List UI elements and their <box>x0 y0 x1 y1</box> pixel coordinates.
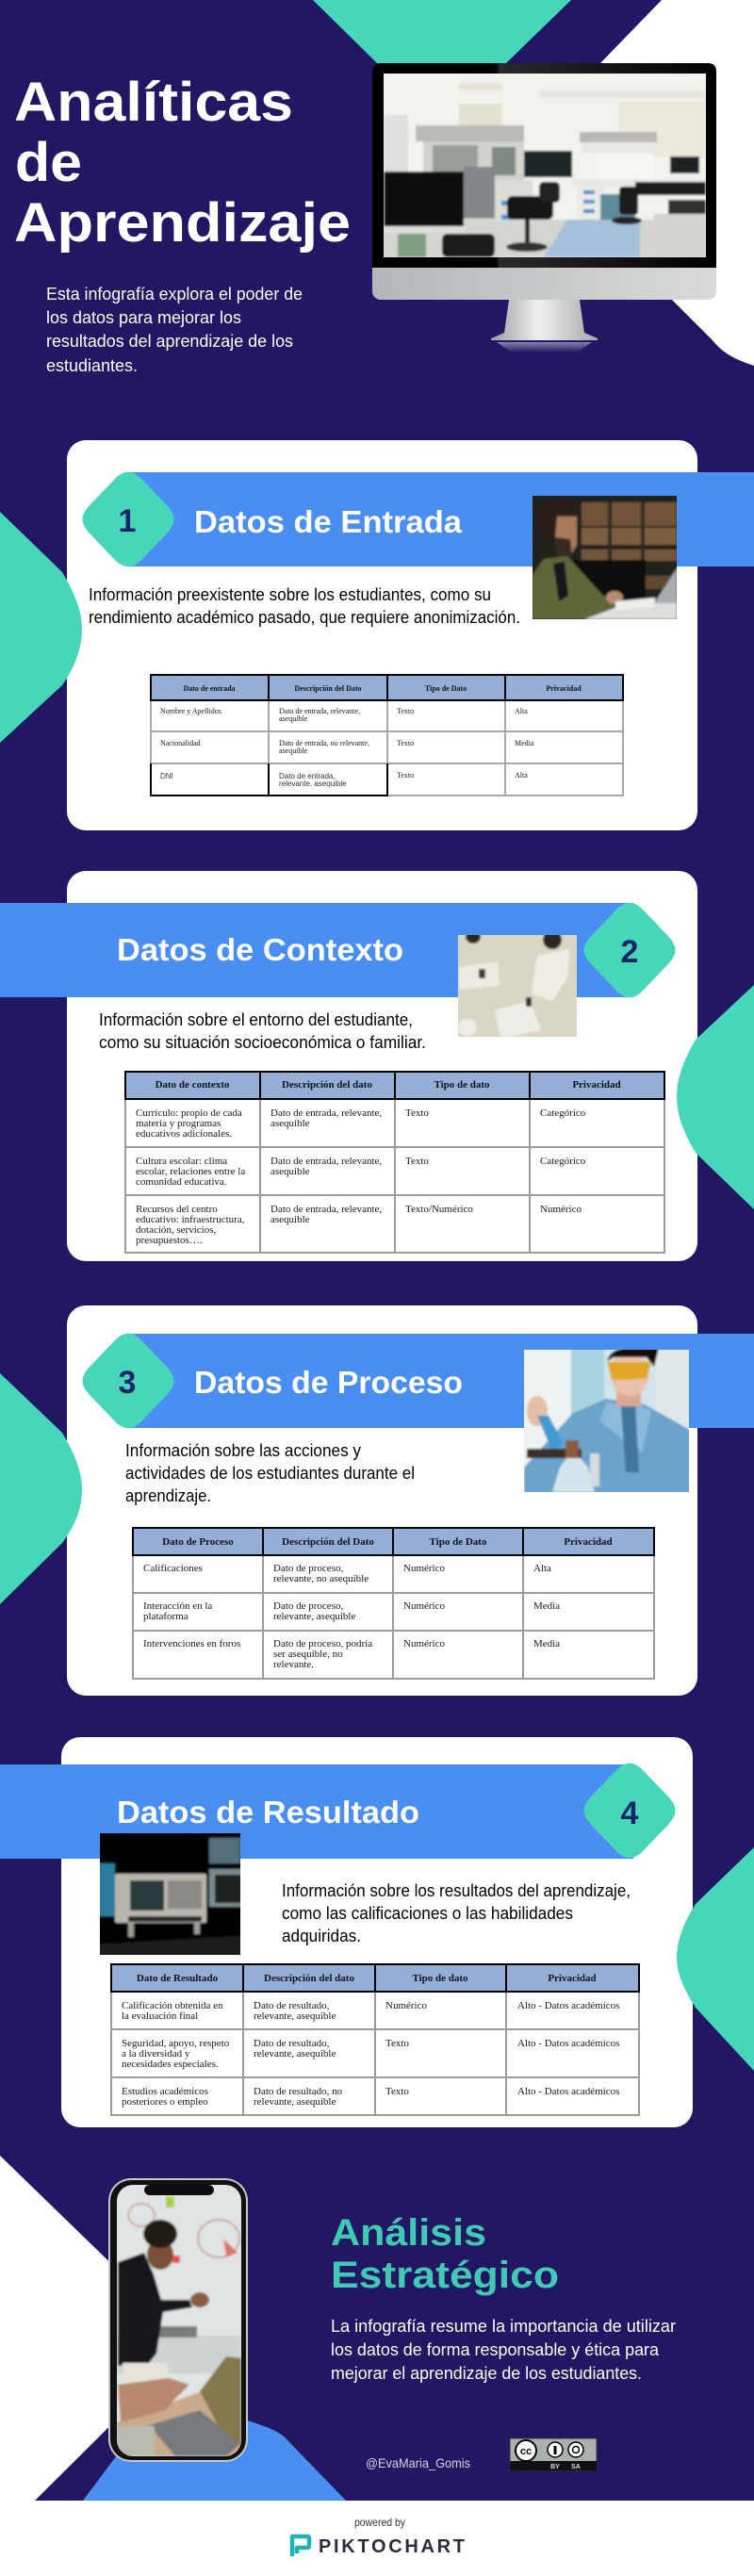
card background <box>67 440 697 830</box>
number badge 1 <box>83 472 173 566</box>
table: datos de proceso: Media <box>533 1638 560 1649</box>
table: datos de contexto: Dato de entrada, relevante, <box>270 1108 382 1119</box>
heading: Datos de Resultado <box>117 1795 419 1829</box>
table: datos de resultado <box>111 1964 639 2115</box>
intro text: los datos para mejorar los <box>46 308 241 327</box>
closing text: La infografía resume la importancia de utilizar <box>331 2317 676 2336</box>
title: Analíticas <box>14 72 293 133</box>
table: datos de contexto: asequible <box>270 1166 310 1177</box>
table: datos de proceso: Numérico <box>403 1600 445 1612</box>
cc license badge: BY <box>550 2464 560 2470</box>
photo: papers on a desk <box>458 935 577 1037</box>
table: datos de proceso: Numérico <box>403 1563 445 1574</box>
description: Información sobre los resultados del aprendizaje, <box>282 1881 631 1900</box>
table: datos de proceso: Media <box>533 1600 560 1612</box>
table: datos de resultado: Alto - Datos académicos <box>517 2086 619 2097</box>
cc license badge <box>510 2438 597 2470</box>
table: datos de entrada: Descripción del Dato <box>294 684 362 693</box>
table: datos de resultado: Tipo de dato <box>412 1973 468 1984</box>
table: datos de entrada: Nombre y Apellidos <box>160 707 221 715</box>
table: datos de contexto: Recursos del centro <box>136 1204 218 1215</box>
teal trapezoid <box>313 0 571 113</box>
table: datos de contexto: Dato de contexto <box>156 1079 230 1091</box>
closing text <box>331 2317 676 2383</box>
table: datos de entrada: Dato de entrada, <box>279 772 336 780</box>
table: datos de entrada: Dato de entrada <box>183 684 236 693</box>
footer <box>0 2501 754 2576</box>
teal blob left 1 <box>0 512 82 743</box>
header band <box>130 472 754 566</box>
cc license badge: cc <box>520 2446 532 2457</box>
table: datos de entrada: Alta <box>515 771 528 779</box>
heading: Datos de Contexto <box>117 932 403 967</box>
table: datos de proceso: Interacción en la <box>143 1600 212 1612</box>
header band <box>0 1764 633 1859</box>
description: Información preexistente sobre los estudiantes, como su <box>89 585 491 604</box>
closing heading <box>331 2212 559 2296</box>
closing heading: Análisis <box>331 2212 486 2254</box>
white triangle left <box>0 2156 193 2501</box>
table: datos de contexto: Cultura escolar: clima <box>136 1156 227 1167</box>
table: datos de contexto: asequible <box>270 1214 310 1225</box>
phone illustration <box>107 2175 251 2466</box>
title: de <box>15 132 82 193</box>
description: actividades de los estudiantes durante el <box>125 1464 415 1483</box>
table: datos de entrada: Dato de entrada, relevante, <box>279 707 360 715</box>
monitor illustration <box>372 63 716 353</box>
table: datos de entrada: Nacionalidad <box>160 739 201 747</box>
header band <box>130 1334 754 1428</box>
table: datos de contexto: Texto <box>405 1156 429 1167</box>
table: datos de contexto: comunidad educativa. <box>136 1176 227 1188</box>
description: rendimiento académico pasado, que requiere anonimización. <box>89 608 520 627</box>
table: datos de proceso: Alta <box>533 1563 551 1574</box>
white corner shape <box>528 0 754 366</box>
description <box>99 1010 426 1052</box>
number badge 2 <box>584 903 675 997</box>
panel: Datos de Resultado <box>0 1737 693 2127</box>
intro text <box>46 285 303 375</box>
table: datos de proceso: relevante, asequible <box>273 1611 355 1622</box>
table: datos de resultado: necesidades especiales. <box>122 2059 219 2070</box>
table: datos de proceso: Dato de proceso, <box>273 1563 343 1574</box>
table: datos de entrada: Privacidad <box>546 684 582 693</box>
table: datos de proceso: Calificaciones <box>143 1563 203 1574</box>
table: datos de entrada: Alta <box>515 707 528 715</box>
table: datos de contexto: Descripción del dato <box>282 1079 372 1091</box>
footer background <box>0 2501 754 2576</box>
panel: Datos de Proceso <box>67 1305 754 1696</box>
table: datos de entrada: Media <box>515 739 534 747</box>
piktochart logo icon <box>292 2536 309 2556</box>
table: datos de entrada <box>151 675 623 796</box>
table: datos de contexto: dotación, servicios, <box>136 1224 216 1236</box>
table: datos de contexto: presupuestos…. <box>136 1235 203 1246</box>
table: datos de proceso: Tipo de Dato <box>430 1536 487 1548</box>
table: datos de proceso: relevante. <box>273 1659 314 1670</box>
description: como su situación socioeconómica o familiar. <box>99 1033 426 1052</box>
table: datos de resultado: Alto - Datos académicos <box>517 2038 619 2049</box>
teal blob left 3 <box>0 1373 82 1604</box>
table: datos de resultado: relevante, asequible <box>254 2096 336 2108</box>
table: datos de contexto: Texto <box>405 1108 429 1119</box>
closing text: los datos de forma responsable y ética para <box>331 2340 660 2359</box>
table: datos de resultado: Dato de resultado, <box>254 2000 330 2011</box>
hero section <box>14 0 754 375</box>
closing section <box>0 2156 676 2501</box>
heading: Datos de Entrada <box>194 504 463 539</box>
card background <box>67 1305 697 1696</box>
description: Información sobre las acciones y <box>125 1441 361 1460</box>
table: datos de contexto: asequible <box>270 1118 310 1129</box>
number badge 4: 4 <box>621 1796 639 1831</box>
powered by: powered by <box>354 2516 405 2529</box>
table: datos de proceso: ser asequible, no <box>273 1649 343 1660</box>
table: datos de entrada: Dato de entrada, no relevante, <box>279 739 369 747</box>
table: datos de contexto: educativos adicionales. <box>136 1128 232 1140</box>
table: datos de resultado: a la diversidad y <box>122 2048 190 2059</box>
panel: Datos de Contexto <box>0 871 697 1261</box>
intro text: estudiantes. <box>46 356 138 375</box>
description: Información sobre el entorno del estudiante, <box>99 1010 413 1029</box>
table: datos de contexto: Privacidad <box>572 1079 621 1091</box>
number badge 2: 2 <box>621 934 638 970</box>
blue shape <box>83 2385 346 2501</box>
table: datos de proceso: relevante, no asequible <box>273 1573 369 1584</box>
table: datos de entrada: Texto <box>397 771 414 779</box>
table: datos de proceso: Descripción del Dato <box>282 1536 374 1548</box>
card background <box>67 871 697 1261</box>
intro text: resultados del aprendizaje de los <box>46 332 293 351</box>
table: datos de entrada: relevante, asequible <box>279 779 347 788</box>
table: datos de contexto: materia y programas <box>136 1118 221 1129</box>
table: datos de contexto: Texto/Numérico <box>405 1204 473 1215</box>
table: datos de resultado: Dato de resultado, <box>254 2038 330 2049</box>
table: datos de resultado: la evaluación final <box>122 2010 198 2022</box>
number badge 3 <box>83 1334 173 1428</box>
table: datos de proceso: Numérico <box>403 1638 445 1649</box>
table: datos de resultado: Privacidad <box>548 1973 597 1984</box>
table: datos de resultado: Descripción del dato <box>264 1973 354 1984</box>
teal blob right 4 <box>677 1847 754 2071</box>
photo: man at laptop <box>533 496 677 619</box>
table: datos de contexto: Tipo de dato <box>434 1079 490 1091</box>
table: datos de resultado: Alto - Datos académicos <box>517 2000 619 2011</box>
number badge 1: 1 <box>119 503 136 539</box>
table: datos de entrada: asequible <box>279 747 308 755</box>
title <box>14 72 351 254</box>
table: datos de proceso: plataforma <box>143 1611 188 1622</box>
table: datos de proceso: Privacidad <box>564 1536 613 1548</box>
description <box>125 1441 415 1505</box>
table: datos de proceso: Dato de proceso, podría <box>273 1638 372 1649</box>
number badge 4 <box>584 1764 675 1858</box>
table: datos de resultado: Dato de resultado, no <box>254 2086 343 2097</box>
table: datos de contexto: escolar, relaciones entre la <box>136 1166 245 1177</box>
table: datos de proceso <box>133 1528 654 1679</box>
table: datos de contexto: Categórico <box>540 1156 586 1167</box>
table: datos de resultado: relevante, asequible <box>254 2010 336 2022</box>
description: como las calificaciones o las habilidades <box>282 1904 573 1923</box>
description: adquiridas. <box>282 1927 361 1945</box>
title: Aprendizaje <box>14 192 351 254</box>
teal blob right 2 <box>677 985 754 1209</box>
table: datos de resultado: Numérico <box>385 2000 427 2011</box>
table: datos de resultado: Seguridad, apoyo, respeto <box>122 2038 230 2049</box>
table: datos de proceso: Dato de Proceso <box>162 1536 234 1548</box>
table: datos de resultado: relevante, asequible <box>254 2048 336 2059</box>
table: datos de resultado: posteriores o empleo <box>122 2096 208 2108</box>
table: datos de resultado: Dato de Resultado <box>137 1973 219 1984</box>
photo: oscilloscope <box>100 1833 240 1955</box>
card background <box>61 1737 693 2127</box>
author handle: @EvaMaria_Gomis <box>366 2455 470 2470</box>
table: datos de entrada: Tipo de Dato <box>425 684 467 693</box>
piktochart wordmark: PIKTOCHART <box>319 2536 465 2557</box>
table: datos de resultado: Calificación obtenida en <box>122 2000 223 2011</box>
description: aprendizaje. <box>125 1486 211 1505</box>
table: datos de contexto: educativo: infraestructura, <box>136 1214 245 1225</box>
panel: Datos de Entrada <box>67 440 754 830</box>
table: datos de entrada: Texto <box>397 739 414 747</box>
table: datos de contexto: Currículo: propio de cada <box>136 1108 242 1119</box>
table: datos de contexto <box>125 1072 664 1253</box>
table: datos de contexto: Dato de entrada, relevante, <box>270 1156 382 1167</box>
intro text: Esta infografía explora el poder de <box>46 285 303 304</box>
table: datos de proceso: Intervenciones en foros <box>143 1638 240 1649</box>
description <box>282 1881 631 1945</box>
closing heading: Estratégico <box>331 2255 559 2296</box>
table: datos de proceso: Dato de proceso, <box>273 1600 343 1612</box>
table: datos de resultado: Texto <box>385 2038 409 2049</box>
table: datos de contexto: Numérico <box>540 1204 582 1215</box>
header band <box>0 903 633 997</box>
table: datos de entrada: DNI <box>160 772 173 780</box>
photo: scientist with flask <box>524 1350 689 1492</box>
description <box>89 585 520 627</box>
cc license badge: SA <box>571 2464 581 2470</box>
heading: Datos de Proceso <box>194 1365 463 1400</box>
closing text: mejorar el aprendizaje de los estudiantes. <box>331 2364 642 2383</box>
table: datos de resultado: Estudios académicos <box>122 2086 208 2097</box>
table: datos de contexto: Categórico <box>540 1108 586 1119</box>
number badge 3: 3 <box>119 1365 136 1401</box>
table: datos de entrada: Texto <box>397 707 414 715</box>
table: datos de contexto: Dato de entrada, relevante, <box>270 1204 382 1215</box>
table: datos de resultado: Texto <box>385 2086 409 2097</box>
table: datos de entrada: asequible <box>279 714 308 723</box>
